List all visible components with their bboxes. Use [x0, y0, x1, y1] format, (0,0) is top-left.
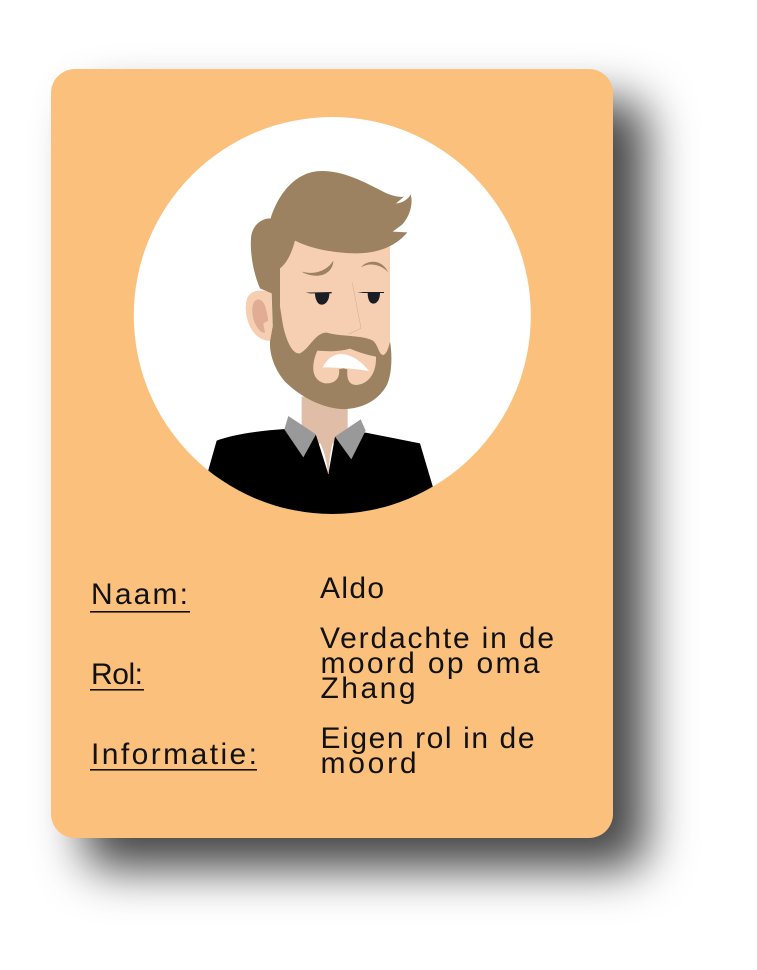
nose line [349, 283, 361, 334]
value: information: moord [320, 747, 416, 780]
ear [246, 290, 273, 341]
panel: suspect card [51, 69, 613, 838]
value: role description: Verdachte in de [320, 622, 554, 655]
value: role description: Zhang [320, 672, 416, 705]
value: information [320, 722, 534, 780]
face [280, 240, 390, 363]
right eyebrow [361, 262, 388, 272]
teeth [323, 354, 369, 371]
illustration: neck and shirt [208, 397, 433, 520]
beard [270, 292, 391, 409]
illustration: head [246, 171, 412, 409]
field: Rol: Rol: [91, 658, 143, 691]
field: Naam: Naam: [91, 578, 188, 611]
left eyebrow [302, 261, 333, 276]
field: Informatie: Informatie: [91, 738, 257, 771]
value: role description: moord op oma [320, 647, 540, 680]
card contents [90, 117, 553, 774]
chin skin [313, 349, 376, 385]
value: Aldo: Aldo [320, 572, 384, 605]
portrait of Aldo in white circle [134, 117, 531, 520]
value: information: Eigen rol in de [320, 722, 534, 755]
left eye [306, 292, 332, 305]
right eye [357, 292, 384, 304]
value: role description [320, 622, 554, 705]
hair [251, 171, 412, 293]
